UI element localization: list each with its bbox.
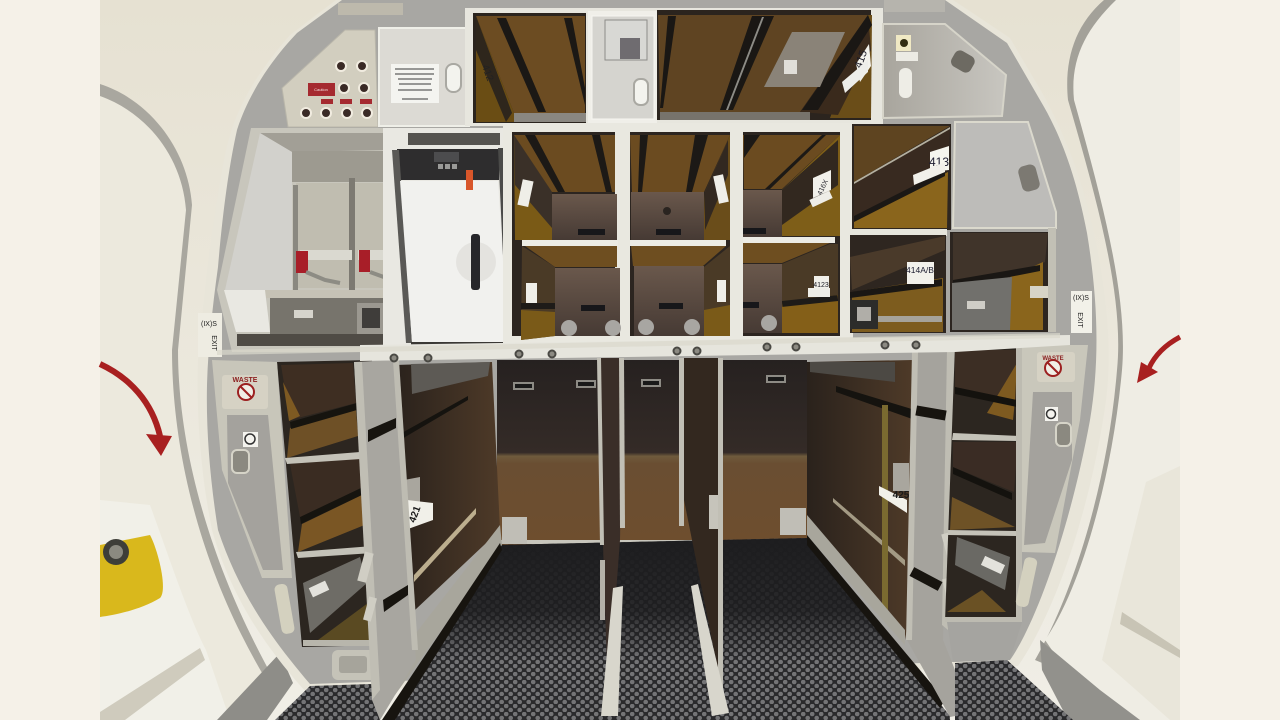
divider: centre left — [597, 358, 625, 716]
faucets — [306, 272, 392, 283]
right door — [1035, 0, 1180, 720]
door panel right — [1045, 0, 1180, 720]
door: right divider — [906, 350, 957, 717]
top shelves frame — [465, 8, 883, 126]
bay frame — [945, 617, 1020, 622]
door opening edge left — [100, 84, 280, 720]
breaker switches — [301, 61, 372, 118]
oven bay — [217, 128, 401, 352]
exit sign left: (IX)S — [201, 321, 217, 328]
lower left wall — [521, 246, 555, 340]
red tag — [466, 170, 473, 190]
door handle strip right — [1120, 612, 1180, 658]
steel bin — [955, 537, 1010, 590]
base rail — [807, 515, 905, 645]
outer frame — [217, 128, 400, 352]
bay sill — [303, 640, 377, 646]
wall: left compartment — [382, 362, 502, 720]
label — [526, 283, 537, 303]
shelf — [522, 240, 618, 246]
waste sign: WASTE — [1042, 356, 1064, 362]
label 415 — [842, 44, 871, 93]
waste panel right — [1022, 345, 1088, 553]
door panel — [1024, 392, 1072, 545]
label: 412 — [479, 63, 495, 83]
panel: circuit breakers — [282, 30, 378, 127]
exit sign left — [198, 313, 222, 357]
latch — [1056, 423, 1071, 446]
black rails — [955, 387, 1017, 407]
compartment: 413 — [852, 124, 951, 230]
no smoking sign — [1045, 407, 1058, 421]
upper plate — [810, 362, 895, 382]
upper dark section — [281, 363, 356, 420]
door block right — [1102, 466, 1180, 720]
exit sign right: (IX)S — [1073, 295, 1089, 302]
white door — [400, 181, 508, 342]
door sill left — [217, 653, 293, 720]
waste sign: WASTE — [233, 377, 258, 384]
handle — [456, 234, 496, 290]
lower steel unit — [270, 298, 398, 334]
compartments frame — [503, 123, 853, 345]
upper section — [955, 350, 1018, 400]
door: left divider — [354, 360, 418, 720]
lower wall right — [947, 622, 1022, 662]
divider: centre right — [679, 358, 729, 716]
latch — [1017, 163, 1041, 193]
boiler panels — [293, 178, 390, 290]
rails — [836, 386, 915, 420]
yellow latch cover — [100, 535, 163, 617]
back box — [743, 190, 782, 237]
waste sign — [222, 375, 268, 409]
door sill right — [1040, 640, 1140, 720]
lower ceiling — [743, 243, 830, 263]
right frame strip — [1048, 228, 1056, 332]
shelf — [630, 240, 726, 246]
knobs — [390, 342, 920, 362]
oven unit — [383, 128, 512, 346]
red tap handles — [296, 250, 370, 273]
floor latch left — [332, 650, 377, 680]
bottom bin — [947, 590, 1006, 612]
shelves — [285, 452, 361, 464]
compartment: column 3 — [743, 132, 840, 336]
central white rail — [217, 333, 1070, 362]
back box — [552, 194, 617, 240]
label 413: 413 — [929, 155, 949, 169]
sign — [896, 35, 918, 61]
label 421: 421 — [407, 504, 424, 524]
red arrow left — [100, 364, 172, 456]
rivet plates — [502, 517, 527, 544]
label 421 — [404, 477, 433, 529]
right storage bay — [945, 345, 1025, 622]
label 4123 — [808, 276, 830, 297]
lower ceiling — [525, 246, 617, 267]
compartment: 414A/B — [850, 235, 946, 333]
shelf divider — [850, 229, 947, 236]
vent grille left — [274, 583, 295, 635]
white flap — [224, 290, 270, 332]
arch white trim — [198, 0, 1109, 692]
left wall — [225, 133, 292, 290]
panel: right mid access door — [953, 122, 1056, 228]
compartment: top left — [473, 13, 586, 123]
lower back box — [555, 268, 621, 336]
bracket — [850, 300, 942, 329]
red arrow right — [1137, 337, 1180, 383]
latch — [232, 450, 249, 473]
door panel left — [100, 96, 265, 720]
hinges — [357, 551, 374, 583]
waste sign — [1037, 352, 1075, 382]
lower back box — [743, 264, 782, 333]
warning placard: Caution — [314, 87, 328, 92]
exit sign right — [1071, 291, 1092, 333]
access plate — [764, 32, 845, 87]
compartment: column 1 — [512, 132, 621, 340]
ceiling — [260, 133, 385, 152]
floor rail — [691, 584, 729, 716]
back header — [292, 151, 385, 182]
door opening edge right — [1035, 0, 1180, 720]
label — [709, 495, 718, 529]
label 414A/B: 414A/B — [906, 265, 934, 275]
floor line — [500, 540, 805, 544]
steel box — [952, 277, 1012, 330]
slot handles — [514, 376, 785, 389]
control panel — [397, 149, 499, 180]
exit sign left: EXIT — [210, 335, 217, 352]
hook — [899, 68, 912, 98]
upper plate — [411, 362, 490, 394]
rail — [400, 396, 468, 440]
waste panel left — [212, 360, 292, 578]
wood wedge upper — [283, 382, 300, 421]
hinges — [941, 532, 957, 564]
label 425: 425 — [893, 490, 910, 501]
label 415: 415 — [853, 49, 870, 70]
back wall lower — [497, 360, 807, 545]
shelves — [952, 433, 1020, 441]
black rails — [290, 403, 357, 429]
door handle strip left — [100, 648, 205, 720]
grey arch surround — [207, 0, 1096, 684]
vent — [408, 133, 500, 145]
lower ceiling — [631, 246, 726, 266]
label — [713, 174, 729, 204]
left wood wall — [514, 135, 552, 240]
bottom rail — [237, 334, 399, 348]
exit sign right: EXIT — [1076, 312, 1083, 329]
hinges — [600, 560, 605, 620]
back box — [631, 192, 704, 240]
top beam — [338, 3, 403, 15]
latch — [949, 48, 977, 75]
compartment: top right — [657, 10, 872, 120]
counter — [265, 290, 397, 298]
door block left — [100, 500, 230, 720]
panel: top right access door — [883, 24, 1006, 118]
instruction placard — [391, 64, 439, 103]
middle section — [290, 458, 363, 517]
bottom bin — [318, 600, 376, 640]
label — [517, 179, 534, 207]
rails — [525, 135, 565, 192]
mirror — [605, 20, 647, 60]
label 4123: 4123 — [813, 282, 829, 289]
label — [717, 280, 726, 302]
base — [411, 342, 511, 346]
ceiling — [514, 135, 615, 192]
steel bin — [303, 557, 367, 633]
floor rail — [601, 586, 623, 716]
vent grille right — [1015, 556, 1038, 608]
middle section — [953, 442, 1018, 492]
lower back box — [634, 266, 704, 336]
label 416X — [809, 170, 833, 207]
wood strip — [950, 497, 1015, 530]
bracket — [1030, 286, 1050, 298]
door latch — [634, 79, 648, 105]
label 425 — [879, 463, 910, 513]
floor — [275, 538, 1073, 720]
door latch — [446, 64, 461, 92]
compartment: lower right — [950, 232, 1050, 332]
base rail — [395, 525, 502, 695]
label 416X: 416X — [817, 178, 830, 197]
olive strip — [882, 405, 888, 615]
no smoking sign — [243, 432, 258, 447]
left door — [100, 84, 293, 720]
panel: mirror door — [588, 11, 657, 123]
door panel — [227, 415, 283, 570]
wall: right compartment — [807, 360, 945, 708]
shelf — [743, 237, 835, 243]
left storage bay — [277, 360, 385, 647]
panel: instruction door — [379, 28, 469, 126]
compartment: column 2 — [630, 132, 730, 336]
side vents — [392, 150, 412, 343]
